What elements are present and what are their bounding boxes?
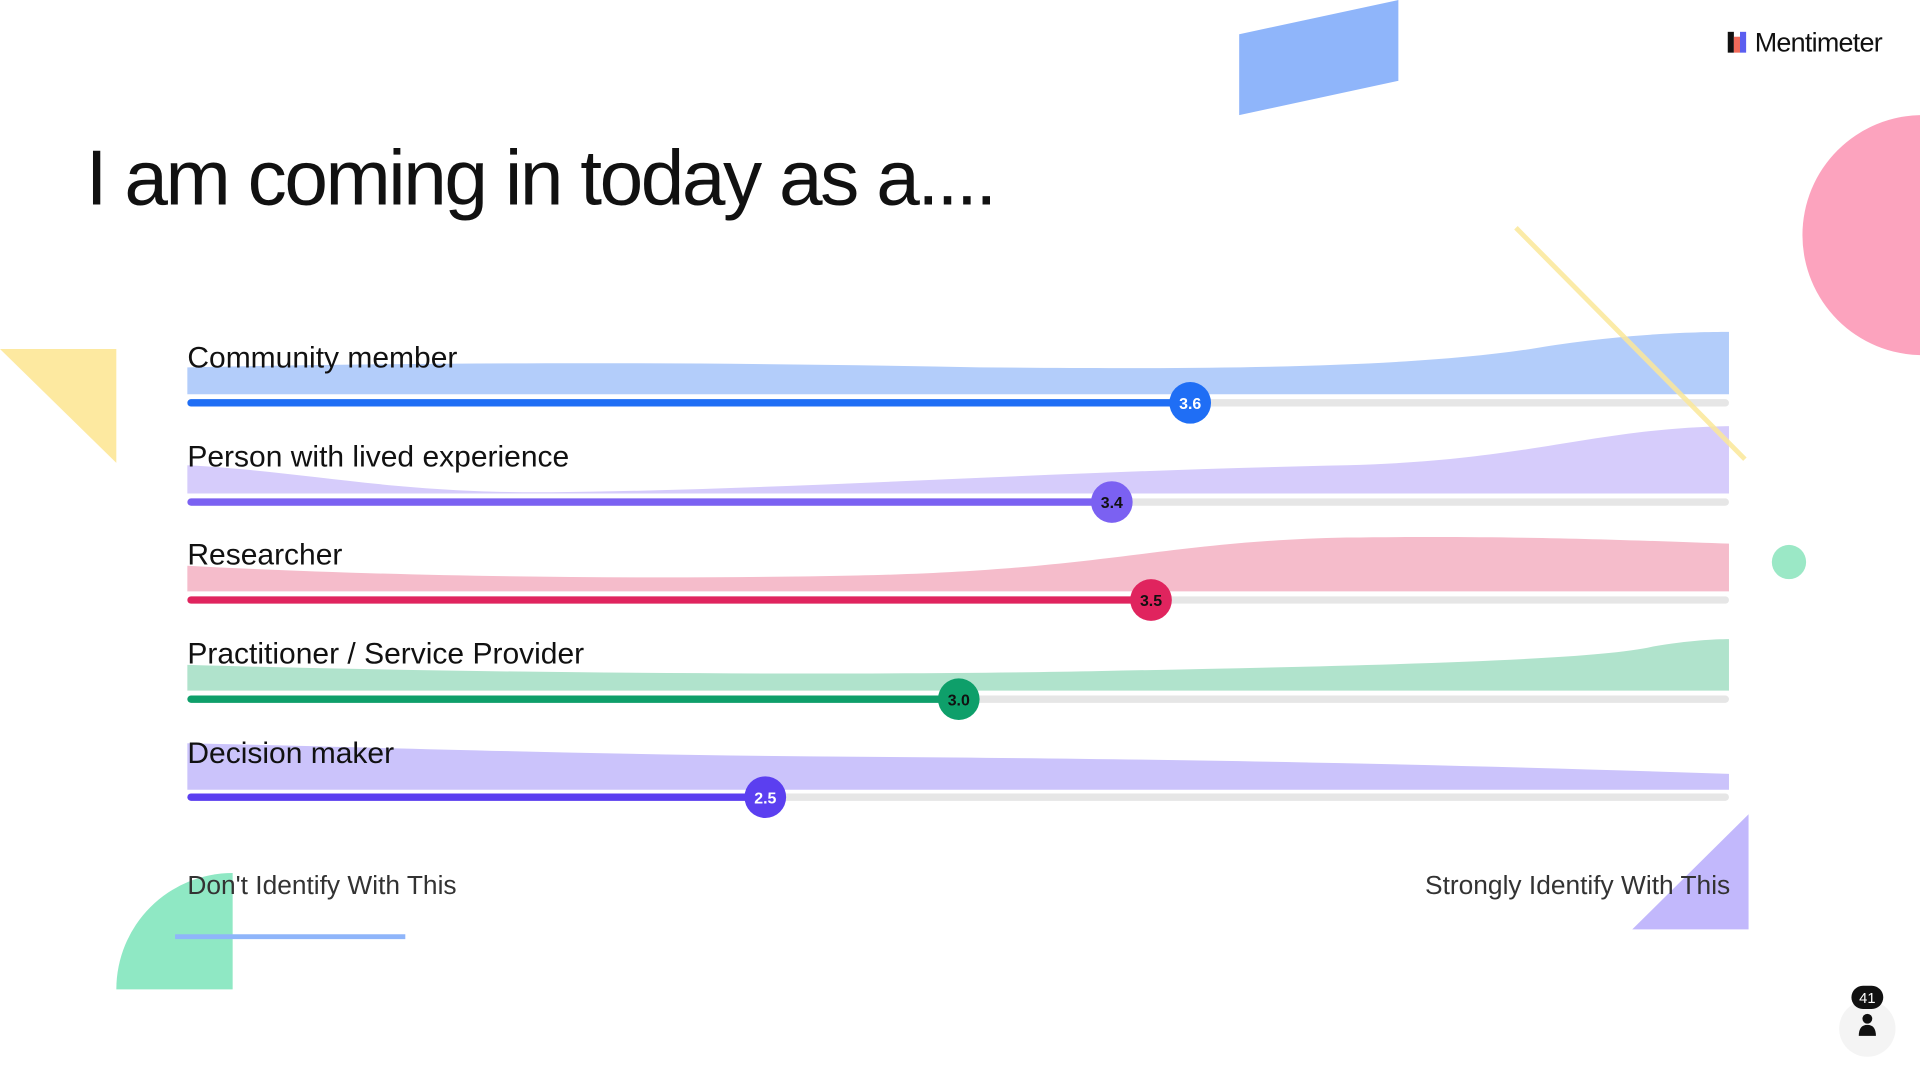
row: Person with lived experience: 3.4 bbox=[1101, 495, 1123, 512]
row: Community member bbox=[187, 332, 1729, 424]
row: Practitioner / Service Provider: 3.0 bbox=[948, 692, 970, 709]
decoration: mint dot bbox=[1772, 545, 1806, 579]
decoration: blue parallelogram bbox=[1239, 0, 1398, 115]
decoration: green quarter circle bbox=[116, 873, 233, 989]
row: Researcher: 3.5 bbox=[1140, 593, 1162, 610]
title: I am coming in today as a.... bbox=[86, 133, 995, 221]
row: Person with lived experience: Person with lived experience bbox=[187, 441, 569, 474]
decoration: yellow triangle bbox=[0, 349, 116, 463]
decoration: purple triangle bbox=[1632, 814, 1749, 929]
axis label: left: Don't Identify With This bbox=[187, 870, 457, 900]
row: Community member: 3.6 bbox=[1179, 396, 1201, 413]
row: Decision maker: Decision maker bbox=[187, 737, 394, 770]
decoration: yellow line bbox=[1516, 228, 1745, 459]
decoration: pink circle bbox=[1802, 115, 1920, 355]
row: Decision maker: 2.5 bbox=[754, 790, 777, 807]
row: Researcher: Researcher bbox=[187, 538, 342, 571]
axis label: right: Strongly Identify With This bbox=[1425, 870, 1730, 900]
row: Practitioner / Service Provider bbox=[187, 638, 1729, 720]
row: Decision maker bbox=[187, 737, 1729, 818]
chart: rows bbox=[187, 332, 1729, 818]
participant count badge bbox=[1839, 986, 1896, 1057]
logo: Mentimeter bbox=[1755, 27, 1883, 57]
decoration: blue line bbox=[175, 935, 405, 939]
row: Practitioner / Service Provider: Practitioner / Service Provider bbox=[187, 638, 584, 671]
row: Person with lived experience bbox=[187, 426, 1729, 523]
row: Researcher bbox=[187, 537, 1729, 621]
row: Community member: Community member bbox=[187, 341, 457, 374]
participant count badge: 41 bbox=[1859, 991, 1876, 1007]
